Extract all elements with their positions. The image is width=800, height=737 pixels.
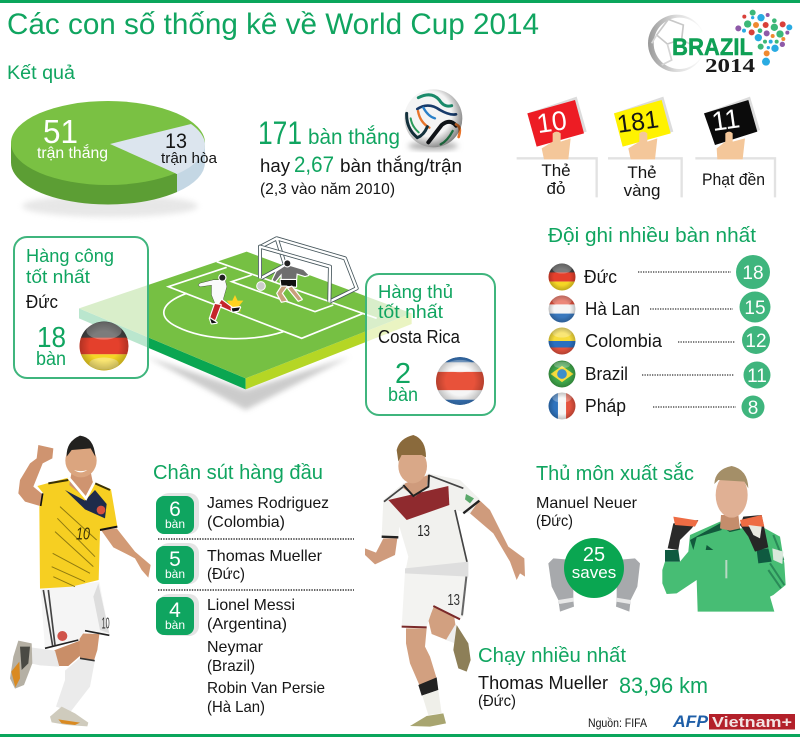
right arm (470, 500, 525, 580)
section: top scoring teams (548, 225, 770, 420)
goal front frame (260, 247, 330, 302)
row: Brazil: 11 (747, 366, 767, 387)
panel: best attack (14, 237, 148, 378)
player photo: James Rodriguez: 10 (102, 615, 110, 632)
player photo: Thomas Mueller (365, 435, 525, 727)
logo word BRAZIL: BRAZIL (672, 34, 753, 61)
number: 10: 10 (535, 105, 569, 139)
Vietnam+ badge (709, 714, 795, 730)
row: Germany (548, 255, 770, 291)
divider (158, 538, 354, 540)
section: cards (517, 97, 775, 200)
team name: Đức (26, 292, 58, 312)
pitch illustration (79, 238, 412, 410)
panel: best defence (366, 274, 495, 415)
number: 18: 18 (37, 322, 66, 354)
keeper wristbands (665, 550, 680, 562)
row: France: Pháp (585, 396, 626, 416)
badge: 5 goals: bàn (165, 567, 185, 581)
raised sock (23, 647, 59, 667)
player country: (Đức) (478, 693, 516, 710)
brackets (517, 158, 775, 197)
shorts (41, 582, 109, 649)
label: red cards: Thẻ (541, 161, 571, 180)
team name: Costa Rica (378, 327, 461, 347)
bottom bar (0, 734, 800, 737)
player name: Thomas Mueller (478, 673, 608, 693)
divider (158, 589, 354, 591)
saves badge (564, 538, 624, 598)
badge: 6 goals (156, 493, 199, 534)
heading line 2: tốt nhất (378, 302, 443, 322)
collar and sash (65, 490, 107, 518)
star impact (227, 295, 243, 312)
keeper gloves (668, 520, 698, 550)
badge: 4 goals (156, 594, 199, 636)
caption: goals: bàn (36, 349, 66, 370)
scorer: Thomas Mueller: Thomas Mueller (207, 548, 323, 565)
front boot (410, 713, 446, 727)
label: penalties: Phạt đền (702, 171, 765, 189)
stat: distance: 83,96 km (619, 673, 708, 698)
number 10 on jersey: 10 (76, 523, 90, 543)
stat: 2,67: 2,67 (294, 152, 334, 177)
keeper neck (720, 515, 740, 531)
heading: Đội ghi nhiều bàn nhất (548, 225, 756, 247)
standing leg (79, 633, 99, 661)
stat: 171 goals: 171 (258, 115, 302, 151)
scorer country: Germany: (Đức) (207, 566, 245, 583)
left arm (365, 538, 397, 564)
pitch surface (79, 252, 412, 378)
title: Các con số thống kê về World Cup 2014 (7, 8, 539, 41)
scorer: James Rodriguez: James Rodriguez (207, 495, 329, 512)
player photo: James Rodriguez (10, 436, 151, 726)
ball (257, 282, 265, 290)
standing sock (56, 658, 95, 712)
raised leg: thigh (53, 641, 81, 666)
scorer country: Argentina: (Argentina) (207, 616, 287, 633)
player photo: Manuel Neuer (662, 466, 786, 612)
row: Colombia: 12 (745, 331, 767, 352)
badge: 6 goals: bàn (165, 517, 185, 531)
logo: AFP Vietnam+ (672, 712, 795, 731)
scorer: Robin Van Persie: Robin Van Persie (207, 680, 325, 697)
text: goals per match: bàn thắng/trận (340, 155, 462, 176)
text: 2010 comparison: (2,3 vào năm 2010) (260, 181, 395, 198)
pitch side left (79, 308, 246, 389)
goal back frame (261, 238, 357, 302)
black card (704, 97, 760, 159)
number: 11: 11 (710, 103, 742, 137)
pie chart (11, 101, 218, 217)
label: draws caption: trận hòa (161, 150, 218, 167)
icon: Brazuca ball (404, 89, 462, 150)
row: Brazil: Brazil (585, 364, 628, 384)
player photo: Thomas Mueller: 13 (417, 523, 430, 540)
goalkeeper (273, 260, 308, 302)
rear boot (453, 625, 471, 672)
number: 181: 181 (615, 105, 660, 139)
scorer country: Brazil: (Brazil) (207, 658, 255, 675)
Vietnam+ wordmark: Vietnam+ (712, 714, 792, 731)
row: Germany: Đức (584, 267, 617, 287)
row: Colombia: Colombia (585, 331, 663, 351)
front leg (406, 628, 437, 685)
heading: Kết quả: Kết quả (7, 63, 75, 84)
section: goals (258, 89, 462, 198)
goalkeeper country: (Đức) (536, 513, 573, 530)
shorts (402, 572, 467, 627)
rear leg (428, 606, 456, 641)
heading: Thủ môn xuất sắc (536, 462, 694, 485)
icon: grey football (648, 15, 705, 72)
label: 13 draws: 13 (165, 130, 187, 153)
row: Brazil (548, 360, 770, 388)
saves badge: saves (572, 563, 616, 582)
section: best goalkeeper (536, 462, 694, 612)
pitch shadow (147, 357, 350, 410)
jersey (37, 478, 117, 589)
jersey (382, 473, 480, 577)
section: most distance covered (478, 645, 708, 710)
row: Colombia (548, 326, 770, 355)
raised arm (18, 445, 53, 506)
source note: Nguồn: FIFA (588, 716, 647, 730)
row: Netherlands (548, 292, 770, 323)
icon: Germany flag (80, 322, 128, 371)
neck (403, 475, 428, 497)
map of coloured dots (735, 10, 792, 66)
badge: 6 goals: 6 (169, 498, 181, 521)
lowered arm (101, 528, 151, 578)
icon: Costa Rica flag (436, 357, 484, 405)
saves badge: 25 (583, 544, 605, 566)
heading line 1: Hàng công (26, 246, 114, 266)
head (65, 444, 97, 477)
label: 51 wins: 51 (43, 113, 78, 150)
scorer country: Colombia: (Colombia) (207, 514, 285, 531)
text: hay: hay (260, 156, 290, 176)
player photo: Thomas Mueller: 13 (447, 592, 460, 609)
heading: Chạy nhiều nhất (478, 645, 626, 667)
number: 2: 2 (395, 358, 411, 390)
red card (527, 97, 587, 159)
label: yellow cards: Thẻ (627, 163, 657, 182)
logo year 2014: 2014 (705, 55, 755, 77)
heading line 1: Hàng thủ (378, 282, 453, 302)
heading: Chân sút hàng đầu (153, 462, 323, 484)
striker (198, 275, 240, 323)
neck (69, 472, 93, 498)
sock (418, 677, 438, 696)
heading line 2: tốt nhất (26, 267, 90, 287)
head (398, 449, 427, 483)
section: results (7, 63, 218, 217)
top bar (0, 0, 800, 3)
pitch markings (164, 262, 377, 339)
section: top scorers (153, 462, 354, 716)
AFP wordmark: AFP (672, 712, 709, 731)
label: wins caption: trận thắng (37, 143, 108, 162)
row: France: 8 (748, 398, 758, 419)
row: Germany: 18 (742, 263, 764, 284)
badge: 5 goals: 5 (169, 548, 181, 571)
yellow card (614, 97, 673, 159)
caption: goals: bàn (388, 385, 418, 406)
badge: 4 goals: 4 (169, 599, 181, 622)
stat: goals caption: bàn thắng (308, 126, 400, 149)
label: red cards line 2: đỏ (547, 179, 565, 198)
label: yellow cards line 2: vàng (624, 181, 660, 200)
logo: Brazil 2014 (648, 10, 792, 77)
pitch side right (246, 313, 412, 389)
scorer: Neymar: Neymar (207, 639, 264, 656)
badge: 4 goals: bàn (165, 618, 185, 632)
icon: gloves (548, 558, 640, 612)
raised boot (10, 641, 32, 689)
keeper head (716, 472, 748, 518)
goalkeeper name: Manuel Neuer (536, 495, 638, 512)
scorer country: Netherlands: (Hà Lan) (207, 699, 265, 716)
row: Netherlands: 15 (744, 298, 766, 319)
standing boot (50, 707, 88, 726)
scorer: Lionel Messi: Lionel Messi (207, 597, 295, 614)
badge: 5 goals (156, 543, 199, 584)
row: France (548, 392, 764, 420)
row: Netherlands: Hà Lan (585, 299, 640, 319)
keeper jersey (662, 522, 786, 612)
